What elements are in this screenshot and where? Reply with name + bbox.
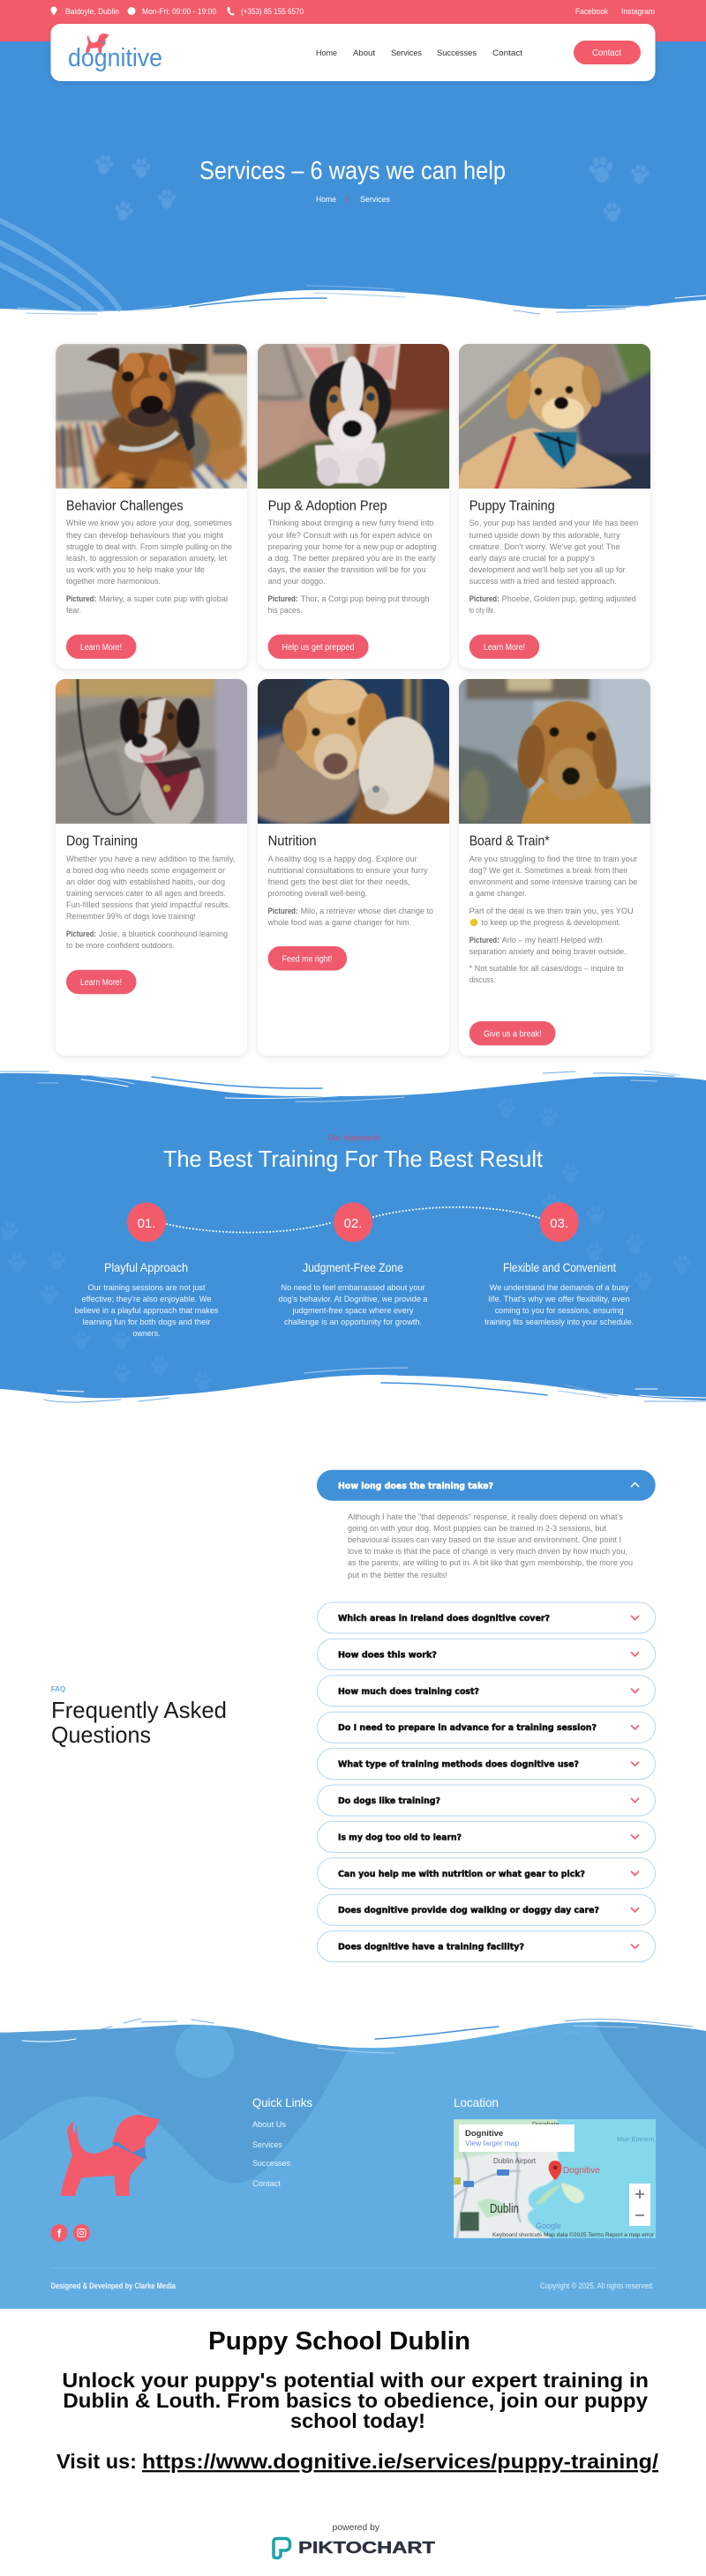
- step 2 text: [279, 1283, 427, 1326]
- button: [268, 946, 347, 970]
- icon: clock: [127, 7, 136, 15]
- faq open answer: put in the better the results!: [348, 1571, 447, 1579]
- description: Remember 99% of dogs love training!: [66, 912, 196, 921]
- description: his paces.: [268, 606, 303, 615]
- faq item 10: Does dognitive have a training facility?: [338, 1943, 524, 1953]
- panel: hero: [0, 0, 706, 314]
- description: preparing your home for a new pup or adopting: [268, 542, 437, 551]
- breadcrumb: [316, 195, 390, 205]
- section eyebrow: Our Approach: [327, 1133, 379, 1143]
- footer dog logo: [61, 2115, 160, 2196]
- button: Feed me right!: [282, 954, 332, 965]
- promo text: [62, 2369, 649, 2432]
- description: [66, 855, 235, 950]
- title: puppy school dublin: Puppy School Dublin: [208, 2327, 470, 2356]
- description: an older dog with established habits, our dog: [66, 877, 225, 886]
- quick links: Contact: [252, 2179, 281, 2189]
- title: Pup & Adoption Prep: [268, 499, 387, 513]
- logo: dognitive: [68, 44, 162, 72]
- step 3: [484, 1203, 634, 1326]
- quick links: Services: [252, 2140, 282, 2150]
- panel: card pup and adoption prep: [253, 340, 456, 668]
- footer divider: [50, 2268, 655, 2269]
- description: to keep up the progress & development.: [482, 918, 621, 927]
- description: Arlo – my heart! Helped with: [502, 936, 603, 945]
- faq open answer: love to make is that the pace of change is very much driven by how much you,: [348, 1547, 627, 1556]
- map: Dublin Airport: [493, 2157, 537, 2165]
- approach paws: [0, 1097, 692, 1392]
- map: Keyboard shortcuts Map data ©2025 Terms Report a map error: [492, 2231, 655, 2238]
- map: Donabate: [532, 2122, 559, 2128]
- description: Fun-filled sessions that yield impactful results.: [66, 900, 230, 909]
- footer wave scratches: [0, 2019, 693, 2053]
- description: they can develop behaviours that you might: [66, 531, 223, 540]
- description: promoting overall well-being.: [268, 889, 367, 898]
- map: Muir Éireann: [617, 2135, 655, 2143]
- powered by: powered by: [332, 2523, 379, 2533]
- button: [469, 635, 539, 659]
- description: Pictured:: [66, 594, 96, 603]
- description: [469, 519, 638, 615]
- faq open answer: [348, 1512, 633, 1579]
- photo: golden pup: [459, 344, 650, 489]
- description: nutritional consultations to ensure your furry: [268, 866, 428, 875]
- description: to be more confident outdoors.: [66, 941, 175, 950]
- description: [469, 855, 637, 984]
- map: Dognitive: [563, 2166, 600, 2176]
- map pin: [549, 2161, 561, 2180]
- description: a game changer.: [469, 889, 527, 898]
- map: Dublin: [490, 2202, 519, 2216]
- description: early days are crucial for a puppy's: [469, 554, 595, 563]
- map info card: View larger map: [465, 2139, 520, 2147]
- description: A healthy dog is a happy dog. Explore our: [268, 855, 417, 863]
- nav links: About: [353, 49, 375, 58]
- faq open item: [317, 1470, 656, 1501]
- step 2: [279, 1203, 427, 1326]
- description: a dog. The better prepared you are in the early: [268, 554, 436, 563]
- quick links: About Us: [252, 2120, 286, 2130]
- description: Phoebe, Golden pup, getting adjusted: [502, 594, 636, 603]
- approach wave scratches: [0, 1071, 706, 1402]
- step 3 text: coming to you for sessions, ensuring: [495, 1306, 624, 1315]
- description: Part of the deal is we then train you, yes YOU: [469, 907, 634, 915]
- step 2 text: No need to feel embarrassed about your: [281, 1283, 425, 1292]
- faq item 3: How much does training cost?: [338, 1687, 479, 1697]
- step 1 text: learning fun for both dogs and their: [83, 1318, 210, 1326]
- hero title: Services – 6 ways we can help: [199, 157, 506, 185]
- hero blue background with wave: [0, 41, 706, 311]
- nav links: Contact: [492, 49, 522, 58]
- button: [268, 635, 369, 659]
- nav links: Successes: [437, 49, 477, 58]
- description: together more harmonious.: [66, 577, 161, 586]
- photo: brown dog: [56, 344, 247, 489]
- map info card: [459, 2124, 575, 2152]
- photo: golden retriever with plush: [258, 679, 449, 824]
- quick links: Quick Links: [252, 2095, 312, 2109]
- step 1 text: effective; they're also enjoyable. We: [81, 1295, 212, 1303]
- panel: card dog training: [51, 675, 251, 1056]
- title: Board & Train*: [469, 834, 550, 848]
- button: Learn More!: [80, 643, 122, 653]
- panel: navigation card: [51, 24, 655, 81]
- faq item 7: Is my dog too old to learn?: [338, 1833, 462, 1842]
- panel: approach section: [0, 1071, 706, 1402]
- visit link: Visit us:: [56, 2450, 137, 2473]
- faq item 4: Do I need to prepare in advance for a training session?: [338, 1723, 597, 1733]
- piktochart logo: PIKTOCHART: [298, 2539, 435, 2557]
- button: Help us get prepped: [282, 643, 355, 653]
- description: [267, 855, 433, 927]
- button: Learn More!: [484, 643, 525, 653]
- faq item 6: Do dogs like training?: [338, 1796, 440, 1806]
- faq open item: How long does the training take?: [338, 1482, 493, 1491]
- faq item 2: [318, 1639, 655, 1669]
- description: us work with you to help make your life: [66, 565, 205, 574]
- description: days, the easier the transition will be for you: [268, 565, 426, 574]
- top bar contact info: Mon-Fri: 09:00 - 19:00: [142, 7, 216, 17]
- step 3 text: life. That's why we offer flexibility, even: [489, 1295, 630, 1303]
- step 3 title: Flexible and Convenient: [503, 1260, 616, 1274]
- faq item 1: [318, 1602, 655, 1633]
- contact button: [574, 41, 641, 64]
- step 2: 02.: [344, 1216, 362, 1231]
- description: Pictured:: [469, 936, 499, 945]
- description: success with a tried and tested approach.: [469, 577, 617, 586]
- description: and your doggo.: [268, 577, 326, 586]
- faq item 9: Does dognitive provide dog walking or doggy day care?: [338, 1906, 599, 1915]
- map zoom control: [629, 2184, 650, 2226]
- description: environment and some intensive training can be: [469, 877, 637, 886]
- description: Pictured:: [268, 907, 298, 915]
- description: discuss.: [469, 975, 496, 984]
- faq open answer: going on with your dog. Most puppies can be trained in 2-3 sessions, but: [348, 1524, 606, 1533]
- map: [454, 2119, 656, 2238]
- panel: card behavior challenges: [56, 341, 252, 668]
- faq item 7: [318, 1821, 655, 1852]
- panel: faq heading: Frequently Asked: [51, 1697, 227, 1723]
- photo: wire-haired dachshund: [459, 679, 650, 824]
- description: creature. Don't worry. We've got you! The: [469, 542, 620, 551]
- copyright: Copyright © 2025. All rights reserved.: [540, 2281, 654, 2290]
- location heading: Location: [454, 2095, 499, 2109]
- faq item 8: [318, 1858, 655, 1889]
- social icons: [51, 2224, 90, 2242]
- description: So, your pup has landed and your life has been: [469, 519, 638, 527]
- panel: card nutrition: [256, 679, 451, 1059]
- breadcrumb: Home: [316, 195, 336, 205]
- social links: Facebook: [575, 7, 608, 17]
- arcs decoration: [0, 220, 119, 309]
- icon: pin: [51, 7, 56, 16]
- step 3 text: [484, 1283, 634, 1326]
- description: dog? We get it. Sometimes a break from their: [469, 866, 627, 875]
- faq item 5: What type of training methods does dognitive use?: [338, 1760, 579, 1770]
- title: Puppy Training: [469, 499, 555, 513]
- promo text: Dublin & Louth. From basics to obedience, join our puppy: [63, 2389, 648, 2412]
- faq item 2: How does this work?: [338, 1650, 437, 1660]
- button: [66, 970, 136, 994]
- description: development and we'll help set you all up for: [469, 565, 626, 574]
- breadcrumb: Services: [360, 195, 390, 205]
- panel: faq heading: FAQ: [51, 1684, 66, 1693]
- panel: footer: [0, 2011, 706, 2311]
- description: [66, 519, 232, 615]
- description: Are you struggling to find the time to train your: [469, 855, 637, 863]
- section heading: The Best Training For The Best Result: [163, 1146, 544, 1172]
- description: While we know you adore your dog, sometimes: [66, 519, 232, 527]
- description: a bored dog who needs some engagement or: [66, 866, 225, 875]
- step 2 title: Judgment-Free Zone: [303, 1260, 403, 1274]
- button: Give us a break!: [484, 1030, 542, 1039]
- nav links: [316, 49, 522, 58]
- description: Pictured:: [268, 594, 298, 603]
- nav links: Home: [316, 49, 337, 58]
- faq item 5: [318, 1749, 655, 1780]
- step 2 text: challenge is an opportunity for growth.: [284, 1318, 422, 1326]
- step 2 text: judgment-free space where every: [291, 1306, 414, 1315]
- wave scratches: [18, 286, 706, 314]
- title: Behavior Challenges: [66, 499, 184, 513]
- description: friend gets the best diet for their needs,: [268, 877, 410, 886]
- top red bar: [0, 0, 706, 41]
- description: training services cater to all ages and breeds.: [66, 889, 226, 898]
- description: Pictured:: [66, 930, 96, 938]
- quick links: [252, 2095, 312, 2189]
- faq item 9: [318, 1894, 655, 1925]
- description: Milo, a retriever whose diet change to: [301, 907, 433, 915]
- step 1: 01.: [138, 1216, 155, 1231]
- faq open answer: as the parents, are willing to put in. A bit like that gym membership, the more you: [348, 1558, 633, 1567]
- button: Learn More!: [80, 978, 122, 988]
- description: your life? Consult with us for expert advice on: [268, 531, 432, 540]
- panel: card board and train: [454, 675, 655, 1056]
- panel: faq heading: Questions: [51, 1721, 151, 1748]
- panel: card puppy training: [454, 340, 655, 668]
- map info card: Dognitive: [465, 2129, 503, 2139]
- description: Thinking about bringing a new furry friend into: [268, 519, 434, 527]
- dotted connector: [167, 1207, 539, 1233]
- approach blue background: [0, 1073, 706, 1400]
- visit link: https://www.dognitive.ie/services/puppy-training/: [142, 2450, 658, 2473]
- step 1: [74, 1203, 219, 1338]
- top bar contact info: Instagram: [621, 7, 655, 17]
- contact button: Contact: [592, 49, 621, 58]
- nav links: Services: [391, 49, 422, 58]
- footer background: [0, 2011, 706, 2311]
- step 1 text: [74, 1283, 219, 1338]
- logo: [68, 34, 162, 72]
- promo text: Unlock your puppy's potential with our expert training in: [62, 2369, 649, 2392]
- description: turned upside down by this adorable, furry: [469, 531, 620, 540]
- step 3 text: training fits seamlessly into your schedule.: [484, 1318, 634, 1326]
- title: Nutrition: [268, 834, 317, 848]
- step 2 text: dog's behavior. At Dognitive, we provide a: [279, 1295, 427, 1303]
- title: Dog Training: [66, 834, 138, 848]
- step 3: 03.: [550, 1216, 568, 1231]
- faq item 6: [318, 1785, 655, 1816]
- description: Thor, a Corgi pup being put through: [301, 594, 430, 603]
- photo: bluetick coonhound: [56, 679, 247, 824]
- description: Josie, a bluetick coonhound learning: [99, 930, 228, 938]
- button: [66, 635, 136, 659]
- description: Marley, a super cute pup with global: [99, 594, 228, 603]
- faq item 8: Can you help me with nutrition or what gear to pick?: [338, 1870, 585, 1879]
- description: Pictured:: [469, 594, 499, 603]
- social icons: f: [57, 2227, 62, 2240]
- top bar contact info: [51, 7, 655, 17]
- faq item 3: [318, 1676, 655, 1706]
- photo: corgi pup: [258, 344, 449, 489]
- step 1 text: Our training sessions are not just: [88, 1283, 206, 1292]
- description: [268, 519, 437, 615]
- step 3 text: We understand the demands of a busy: [490, 1283, 629, 1292]
- panel: faq list: [317, 1470, 656, 1962]
- top bar contact info: Baldoyle, Dublin: [65, 7, 119, 17]
- map: Google: [536, 2221, 561, 2230]
- description: separation anxiety and being braver outside.: [469, 947, 627, 956]
- description: Whether you have a new addition to the family,: [66, 855, 235, 863]
- faq open answer: behavioural issues can vary based on the issue and environment. One point I: [348, 1535, 621, 1544]
- footer credits: Designed & Developed by Clarke Media: [51, 2281, 176, 2290]
- button: [469, 1021, 556, 1046]
- faq open answer: Although I hate the "that depends" response, it really does depend on what's: [348, 1512, 624, 1521]
- step 1 text: believe in a playful approach that makes: [74, 1306, 219, 1315]
- step 1 text: owners.: [132, 1329, 161, 1338]
- description: fear.: [66, 606, 81, 615]
- step 1 title: Playful Approach: [104, 1260, 188, 1274]
- piktochart logo: [274, 2538, 435, 2557]
- faq item 1: Which areas in Ireland does dognitive cover?: [338, 1614, 550, 1624]
- description: struggle to deal with. From simple pulling on the: [66, 542, 232, 551]
- faq item 10: [318, 1931, 655, 1962]
- panel: faq heading: [51, 1684, 227, 1748]
- description: whole food was a game changer for him.: [267, 918, 411, 927]
- quick links: Successes: [252, 2159, 290, 2169]
- icon: phone: [227, 7, 235, 16]
- faq item 4: [318, 1712, 655, 1743]
- description: * Not suitable for all cases/dogs – inquire to: [469, 964, 624, 973]
- hero paws: [93, 153, 651, 223]
- promo text: school today!: [290, 2409, 425, 2432]
- description: to city life.: [469, 606, 495, 615]
- top bar contact info: (+353) 85 155 6570: [241, 7, 304, 17]
- description: leash, to aggression or separation anxiety, let: [66, 554, 227, 563]
